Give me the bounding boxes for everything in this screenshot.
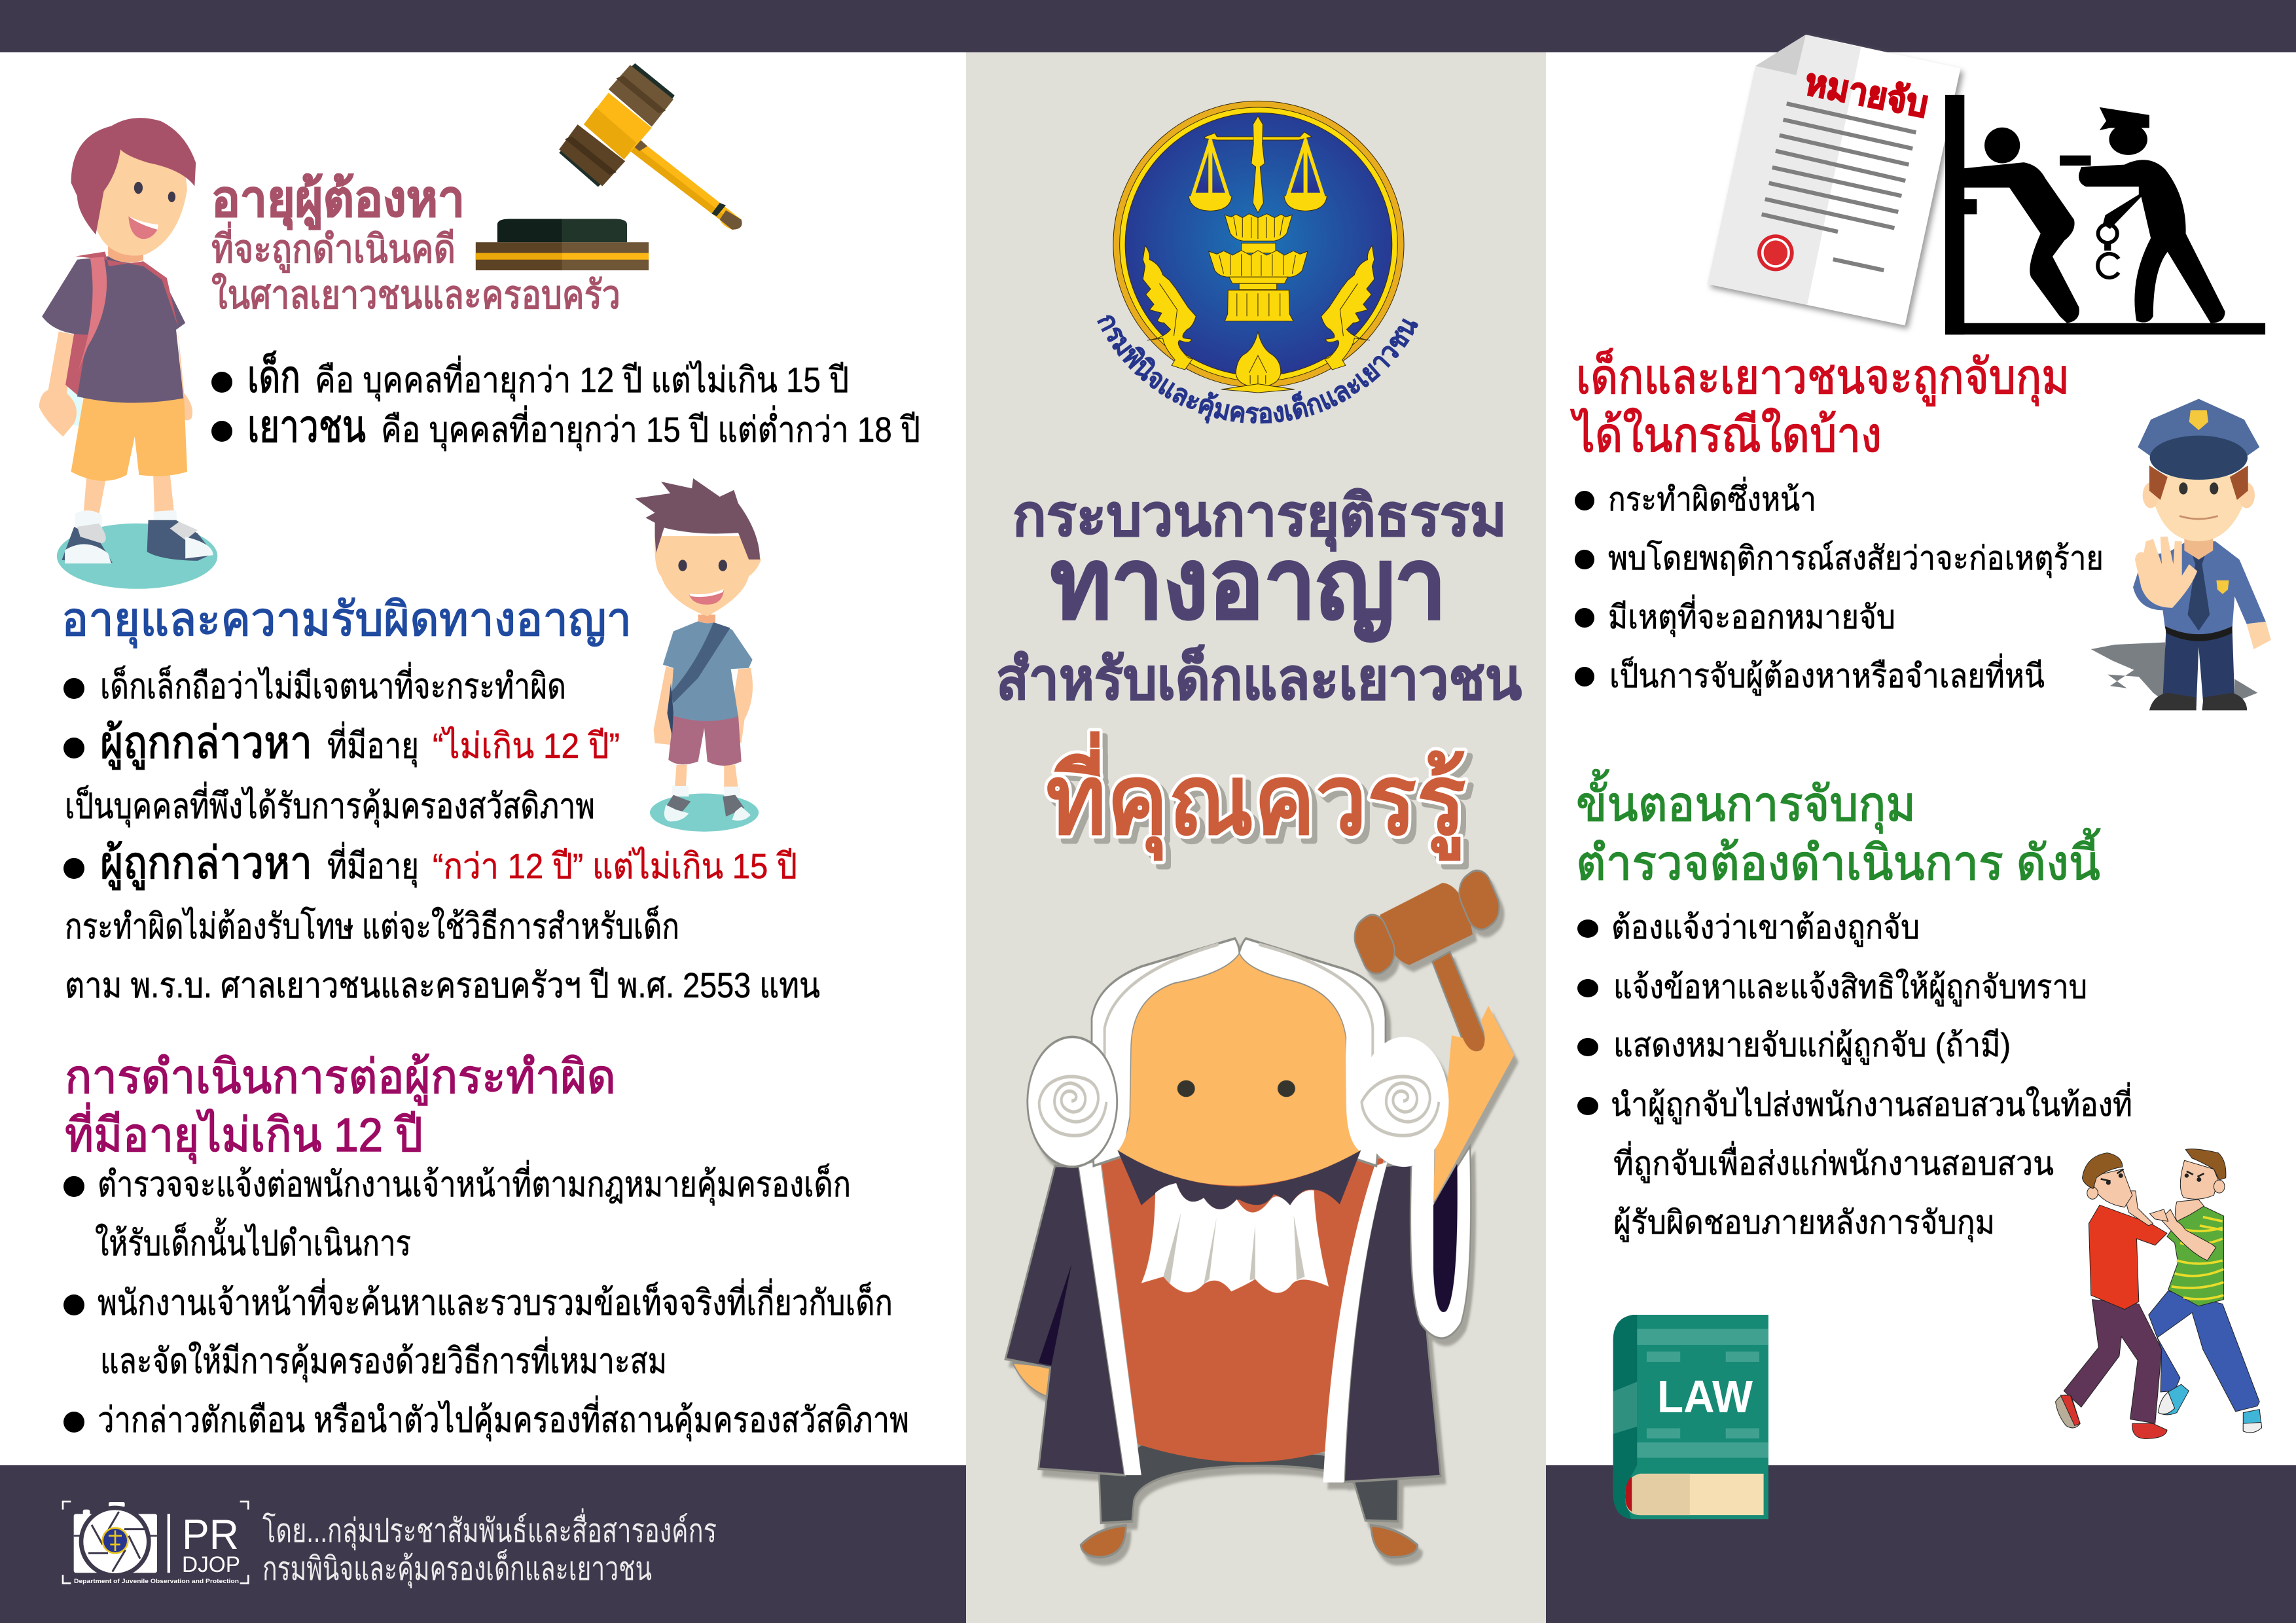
text block: arrest circumstances: เป็นการจับผู้ต้องหาหรือจำเลยที่หนี: [1609, 654, 2045, 696]
main title: [996, 483, 1522, 711]
footer logo: PR DJOP camera mark: [63, 1501, 248, 1584]
text block: criminal responsibility bullets: ผู้ถูกกล่าวหา: [100, 838, 312, 890]
text block: arrest procedure bullets: แสดงหมายจับแก่ผู้ถูกจับ (ถ้ามี): [1613, 1027, 2011, 1065]
text block: arrest procedure bullets: แจ้งข้อหาและแจ้งสิทธิให้ผู้ถูกจับทราบ: [1613, 969, 2087, 1007]
footer credit text: [262, 1508, 717, 1588]
heading: when children can be arrested: เด็กและเยาวชนจะถูกจับกุม: [1576, 349, 2070, 406]
text block: arrest circumstances: พบโดยพฤติการณ์สงสัยว่าจะก่อเหตุร้าย: [1608, 540, 2104, 578]
text block: arrest procedure bullets: ผู้รับผิดชอบภายหลังการจับกุม: [1613, 1204, 1995, 1242]
heading: when children can be arrested: [1571, 349, 2070, 462]
text block: criminal responsibility bullets: เป็นบุคคลที่พึงได้รับการคุ้มครองสวัสดิภาพ: [65, 781, 595, 828]
footer logo: PR DJOP camera mark: PR: [182, 1510, 239, 1558]
main title: สำหรับเด็กและเยาวชน: [996, 644, 1522, 711]
text block: criminal responsibility bullets: ผู้ถูกกล่าวหา: [100, 718, 312, 770]
text block: arrest procedure bullets: ต้องแจ้งว่าเขาต้องถูกจับ: [1611, 909, 1920, 947]
panel: centre column: [966, 52, 1546, 1623]
text block: criminal responsibility bullets: “กว่า 12 ปี” แต่ไม่เกิน 15 ปี: [433, 846, 797, 886]
heading: age of the accused: [211, 171, 620, 317]
main title: กระบวนการยุติธรรม: [1013, 483, 1507, 552]
icon: police arresting a suspect: [1945, 95, 2265, 334]
heading: action against offenders under 12: [65, 1051, 616, 1164]
heading: arrest procedure: [1576, 769, 2100, 890]
text block: definitions of child and youth: เยาวชน: [247, 402, 366, 452]
text block: action bullets: ตำรวจจะแจ้งต่อพนักงานเจ้าหน้าที่ตามกฎหมายคุ้มครองเด็ก: [98, 1160, 851, 1206]
text block: arrest procedure bullets: นำผู้ถูกจับไปส่งพนักงานสอบสวนในท้องที่: [1611, 1082, 2132, 1124]
text block: criminal responsibility bullets: กระทำผิดไม่ต้องรับโทษ แต่จะใช้วิธีการสำหรับเด็ก: [65, 906, 679, 946]
heading: age of the accused: ในศาลเยาวชนและครอบครัว: [211, 273, 620, 317]
text block: criminal responsibility bullets: “ไม่เกิน 12 ปี”: [433, 726, 620, 766]
text block: arrest procedure bullets: [1577, 909, 2132, 1242]
emblem: Department of Juvenile Observation and Protection: [1097, 101, 1418, 424]
icon: law book: [1613, 1315, 1768, 1519]
heading: when children can be arrested: ได้ในกรณีใดบ้าง: [1571, 408, 1882, 462]
heading: age of the accused: ที่จะถูกดำเนินคดี: [211, 222, 456, 273]
illustration: gavel and sound block: [476, 63, 742, 270]
text block: criminal responsibility bullets: ที่มีอายุ: [327, 721, 419, 768]
illustration: boy with shoulder bag: [635, 478, 761, 832]
text block: criminal responsibility bullets: ที่มีอายุ: [327, 842, 419, 888]
text block: arrest circumstances: [1575, 477, 2104, 696]
heading: action against offenders under 12: การดำเนินการต่อผู้กระทำผิด: [65, 1051, 616, 1105]
illustration: boy with backpack: [39, 118, 217, 589]
heading: arrest procedure: ขั้นตอนการจับกุม: [1576, 769, 1916, 834]
text block: arrest procedure bullets: ที่ถูกจับเพื่อส่งแก่พนักงานสอบสวน: [1613, 1141, 2054, 1183]
heading: arrest procedure: ตำรวจต้องดำเนินการ ดังนี้: [1576, 828, 2100, 890]
text block: definitions of child and youth: [211, 351, 920, 452]
top bar: [0, 0, 2296, 52]
illustration: arrest warrant document: หมายจับ: [1802, 61, 1931, 125]
footer band: left: [0, 1465, 966, 1623]
text block: action bullets: และจัดให้มีการคุ้มครองด้วยวิธีการที่เหมาะสม: [100, 1336, 667, 1383]
footer logo: PR DJOP camera mark: Department of Juvenile Observation and Protection: [74, 1578, 239, 1584]
text block: definitions of child and youth: เด็ก: [247, 351, 300, 402]
heading: age and criminal responsibility: อายุและความรับผิดทางอาญา: [62, 594, 632, 648]
text block: arrest circumstances: มีเหตุที่จะออกหมายจับ: [1608, 595, 1895, 637]
illustration: police officer with stop hand: [2091, 399, 2271, 710]
footer credit text: กรมพินิจและคุ้มครองเด็กและเยาวชน: [262, 1549, 652, 1588]
text block: criminal responsibility bullets: ตาม พ.ร.บ. ศาลเยาวชนและครอบครัวฯ ปี พ.ศ. 2553 แทน: [65, 966, 820, 1005]
text block: action bullets: ว่ากล่าวตักเตือน หรือนำตัวไปคุ้มครองที่สถานคุ้มครองสวัสดิภาพ: [98, 1395, 909, 1442]
heading: age of the accused: อายุผู้ต้องหา: [211, 171, 465, 230]
title highlight: what you should know: ที่คุณควรรู้: [1051, 736, 1471, 866]
heading: action against offenders under 12: ที่มีอายุไม่เกิน 12 ปี: [65, 1103, 423, 1164]
title highlight: what you should know: ที่คุณควรรู้: [1046, 731, 1466, 861]
text block: action bullets: พนักงานเจ้าหน้าที่จะค้นหาและรวบรวมข้อเท็จจริงที่เกี่ยวกับเด็ก: [98, 1278, 893, 1323]
footer credit text: โดย...กลุ่มประชาสัมพันธ์และสื่อสารองค์กร: [262, 1508, 717, 1550]
text block: criminal responsibility bullets: เด็กเล็กถือว่าไม่มีเจตนาที่จะกระทำผิด: [100, 662, 566, 706]
text block: action bullets: [63, 1160, 909, 1442]
illustration: two boys fighting: [2056, 1149, 2262, 1438]
main title: ทางอาญา: [1050, 529, 1446, 642]
footer band: right: [1546, 1465, 2296, 1623]
text block: definitions of child and youth: คือ บุคคลที่อายุกว่า 15 ปี แต่ต่ำกว่า 18 ปี: [381, 405, 920, 452]
emblem: Department of Juvenile Observation and Protection: กรมพินิจและคุ้มครองเด็กและเยาวชน: [1097, 315, 1418, 424]
text block: arrest circumstances: กระทำผิดซึ่งหน้า: [1608, 477, 1816, 518]
icon: law book: LAW: [1657, 1371, 1753, 1422]
text block: criminal responsibility bullets: [63, 662, 820, 1005]
text block: definitions of child and youth: คือ บุคคลที่อายุกว่า 12 ปี แต่ไม่เกิน 15 ปี: [315, 355, 849, 402]
illustration: judge with gavel: [1005, 863, 1514, 1558]
text block: action bullets: ให้รับเด็กนั้นไปดำเนินการ: [95, 1218, 411, 1263]
footer logo: PR DJOP camera mark: DJOP: [182, 1552, 240, 1577]
illustration: arrest warrant document: [1708, 35, 1960, 325]
